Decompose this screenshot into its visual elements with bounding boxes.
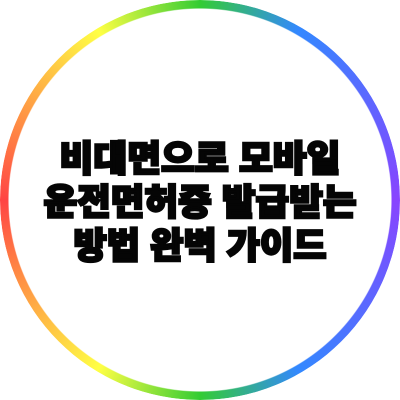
title: 운전면허증 발급받는: [44, 182, 356, 222]
title: 방법 완벽 가이드: [74, 225, 326, 266]
title: 비대면으로 모바일: [60, 138, 340, 179]
